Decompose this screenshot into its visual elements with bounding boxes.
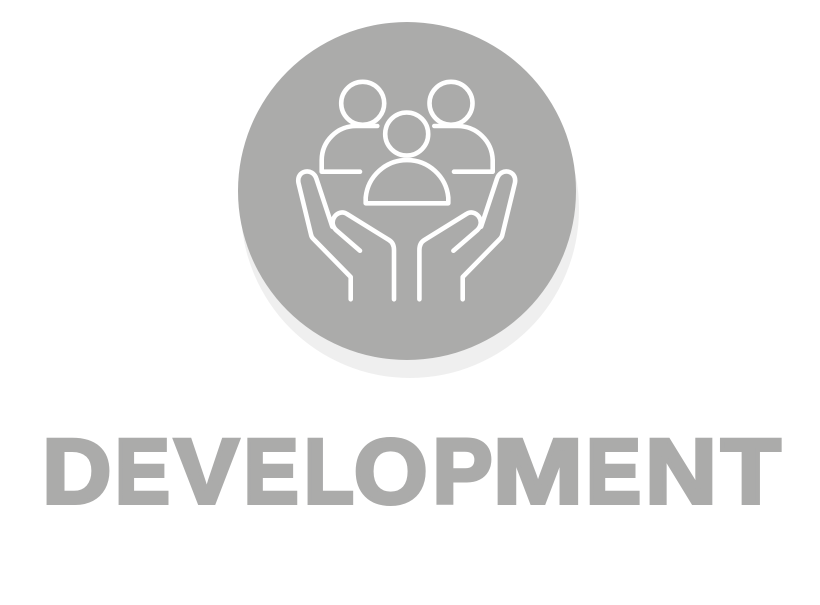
heading: DEVELOPMENT: L	[304, 421, 354, 523]
badge circle shadow	[241, 40, 579, 378]
icon: three people held by two hands	[298, 82, 515, 299]
heading: DEVELOPMENT: N	[645, 420, 717, 523]
heading: DEVELOPMENT	[42, 419, 781, 523]
icon: right hand	[419, 171, 515, 299]
person: center front	[366, 112, 448, 203]
heading: DEVELOPMENT: E	[586, 420, 641, 523]
heading: DEVELOPMENT: O	[354, 419, 428, 523]
heading: DEVELOPMENT: E	[115, 420, 170, 523]
heading: DEVELOPMENT: T	[721, 421, 781, 523]
icon: left hand	[298, 171, 394, 299]
heading: DEVELOPMENT: D	[42, 420, 111, 523]
heading: DEVELOPMENT: V	[174, 420, 239, 523]
heading: DEVELOPMENT: P	[432, 421, 493, 523]
person: left back	[322, 82, 384, 172]
badge circle	[238, 22, 576, 360]
person: right back	[430, 82, 493, 172]
heading: DEVELOPMENT: E	[244, 420, 299, 523]
heading: DEVELOPMENT: M	[493, 421, 583, 523]
